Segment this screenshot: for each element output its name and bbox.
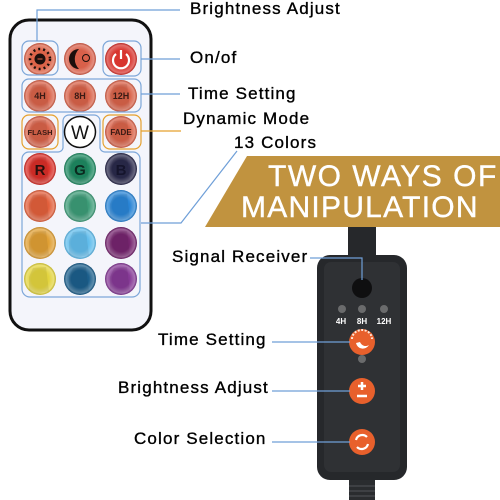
label: 13 Colors: 13 Colors bbox=[234, 133, 317, 152]
button: power bbox=[105, 43, 137, 75]
cable bbox=[348, 227, 376, 500]
controller body bbox=[317, 255, 407, 480]
color button bbox=[349, 429, 375, 455]
button: R: R bbox=[35, 162, 46, 179]
remote body bbox=[10, 20, 151, 330]
controller inner panel bbox=[324, 262, 400, 472]
hour labels bbox=[336, 317, 392, 326]
remote control bbox=[10, 20, 151, 330]
banner title line 1: TWO WAYS OF bbox=[268, 160, 498, 193]
hour labels: 12H bbox=[377, 317, 392, 326]
colour buttons bbox=[24, 190, 137, 295]
hour labels: 4H bbox=[336, 317, 346, 326]
indicator lights bbox=[338, 305, 388, 363]
button: B bbox=[105, 153, 137, 185]
label: Dynamic Mode: Dynamic Mode bbox=[183, 109, 310, 128]
banner title line 2: MANIPULATION bbox=[241, 191, 479, 224]
label: Signal Receiver: Signal Receiver bbox=[172, 247, 308, 266]
inline controller bbox=[317, 255, 407, 480]
time button bbox=[349, 329, 375, 355]
label: Time Setting: Time Setting bbox=[158, 330, 267, 349]
button: FLASH: FLASH bbox=[28, 128, 52, 137]
button: 4H: 4H bbox=[34, 91, 46, 101]
button: 4H bbox=[24, 80, 56, 112]
button: W: W bbox=[71, 123, 89, 144]
label: On/of: On/of bbox=[190, 48, 237, 67]
button: 8H bbox=[64, 80, 96, 112]
hour labels: 8H bbox=[357, 317, 367, 326]
button: G: G bbox=[74, 162, 86, 179]
highlight boxes bbox=[22, 41, 141, 297]
button: 8H: 8H bbox=[74, 91, 86, 101]
button: B: B bbox=[116, 162, 127, 179]
label: Brightness Adjust: Brightness Adjust bbox=[118, 378, 269, 397]
button: moon bbox=[64, 43, 96, 75]
button: G bbox=[64, 153, 96, 185]
button: FLASH bbox=[24, 116, 56, 148]
button: FADE: FADE bbox=[110, 128, 132, 137]
button: brightness bbox=[24, 43, 56, 75]
button: W bbox=[64, 116, 96, 148]
button: FADE bbox=[105, 116, 137, 148]
connector lines for remote bbox=[37, 10, 237, 223]
label: Color Selection: Color Selection bbox=[134, 429, 267, 448]
banner bbox=[205, 156, 500, 227]
signal receiver bbox=[352, 278, 372, 298]
brightness button bbox=[349, 378, 375, 404]
label: Time Setting: Time Setting bbox=[188, 84, 297, 103]
button: R bbox=[24, 153, 56, 185]
connector lines for controller bbox=[272, 258, 362, 442]
button: 12H: 12H bbox=[113, 91, 129, 101]
button: 12H bbox=[105, 80, 137, 112]
